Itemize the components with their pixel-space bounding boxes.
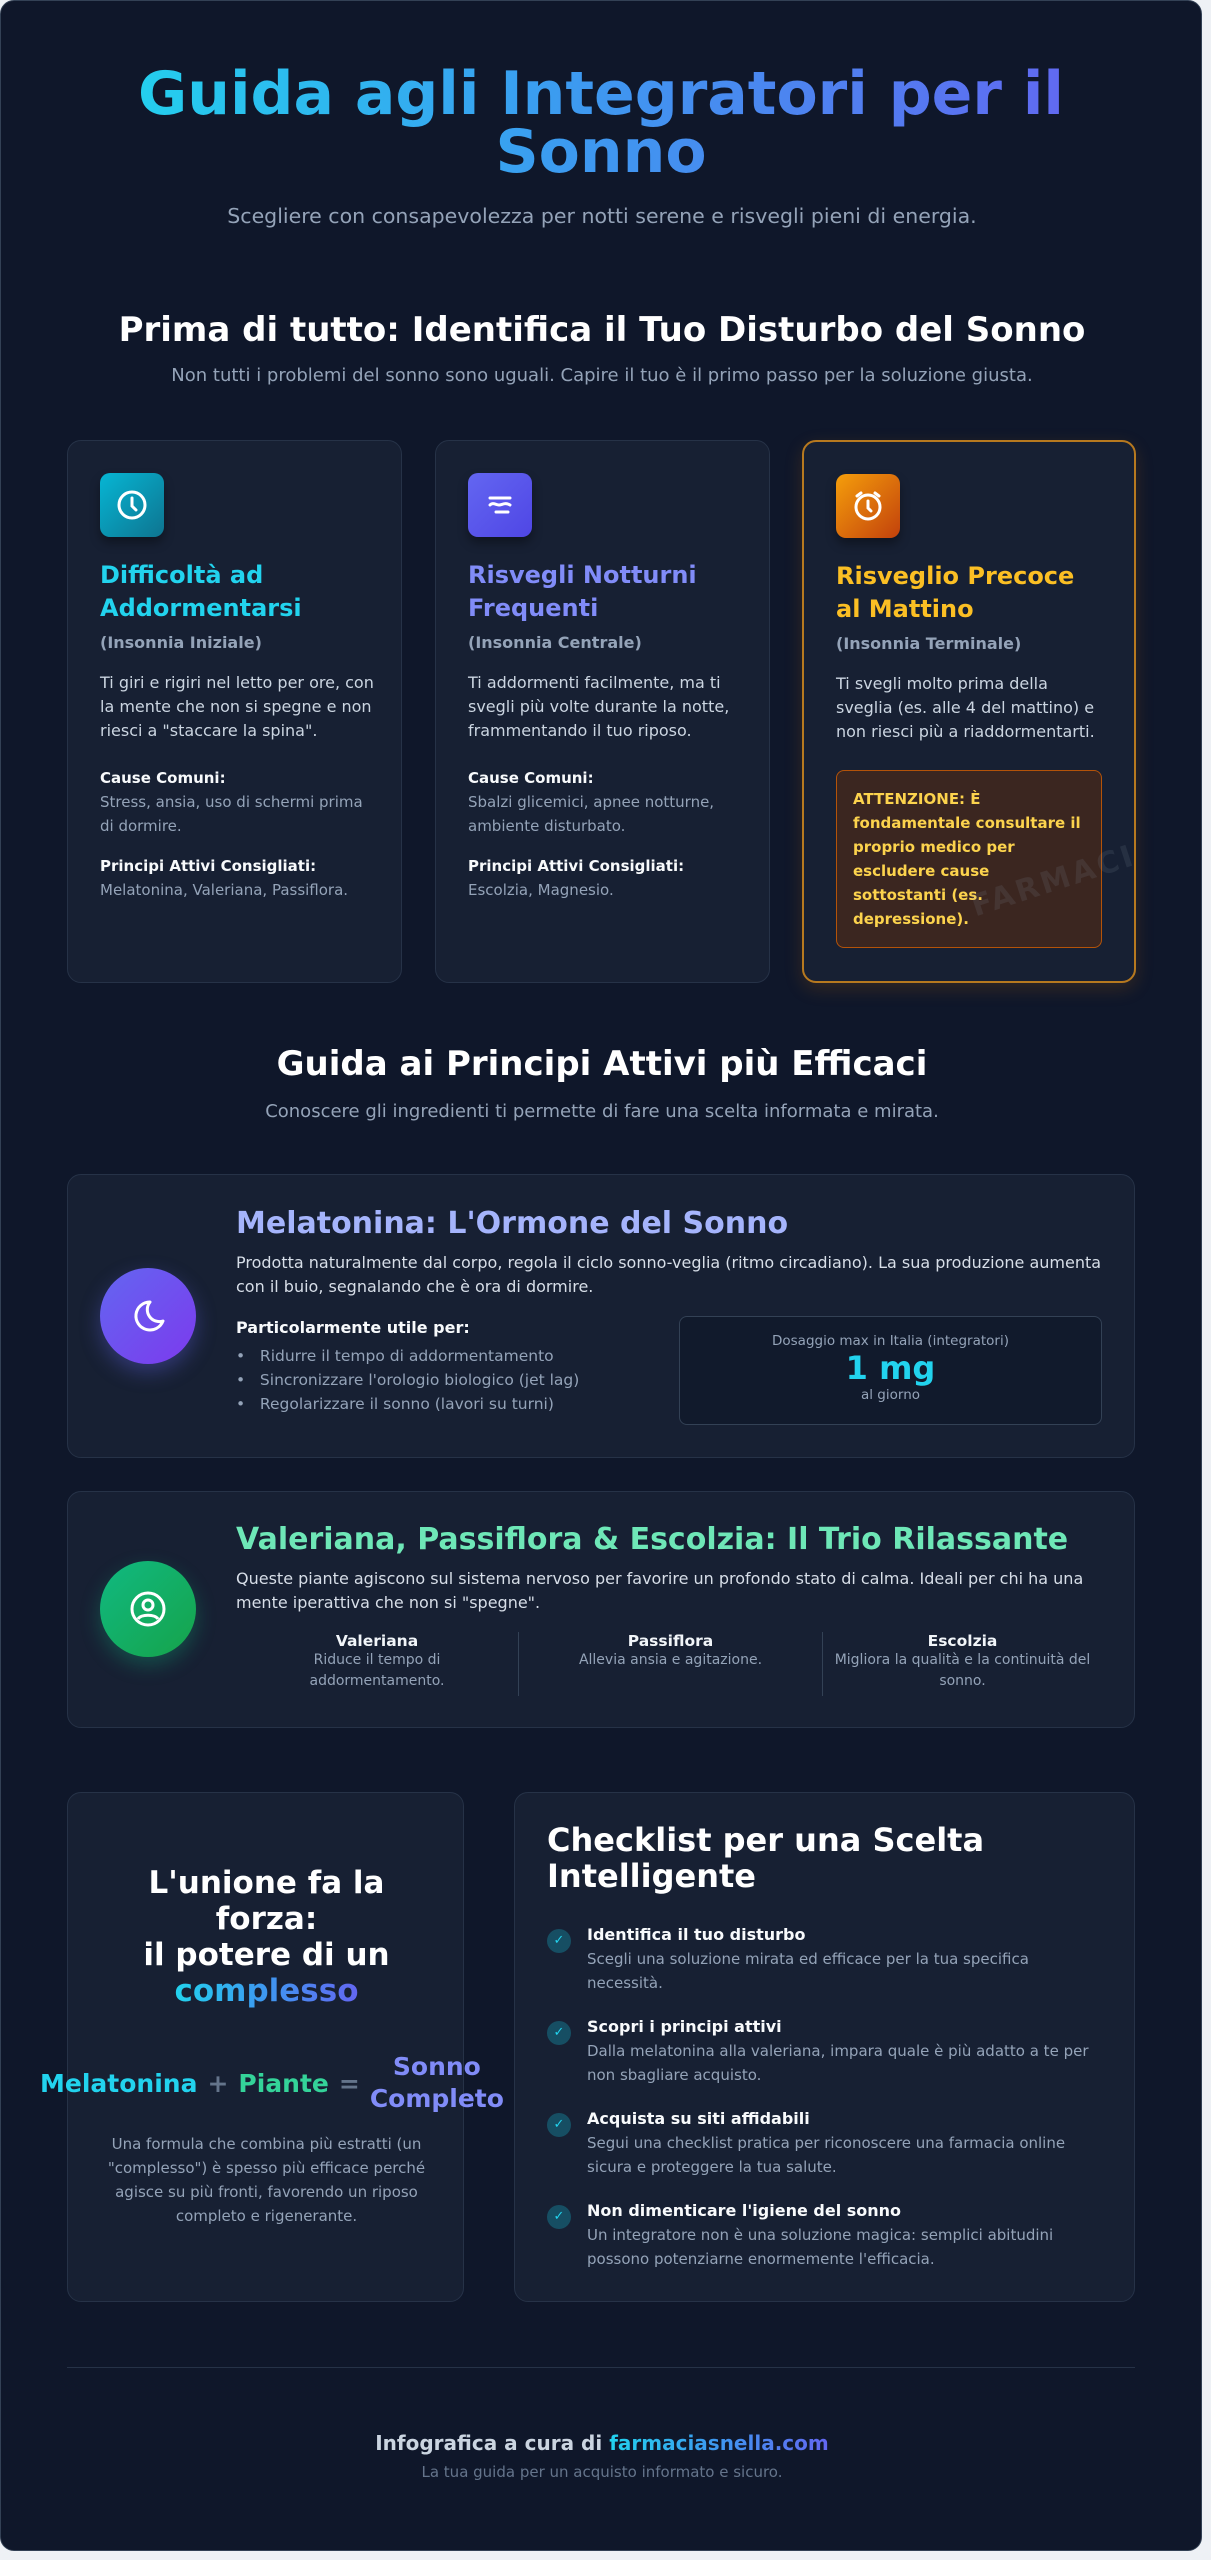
description: Prodotta naturalmente dal corpo, regola il ciclo sonno-veglia (ritmo circadiano). La sua produzione aumenta con il buio, segnalando che è ora di dormire. bbox=[236, 1253, 1101, 1296]
icon: clock bbox=[100, 473, 164, 537]
footer bbox=[375, 2431, 829, 2481]
section subtitle: Non tutti i problemi del sonno sono uguali. Capire il tuo è il primo passo per la soluzione giusta. bbox=[171, 365, 1033, 386]
card text bbox=[100, 561, 374, 899]
item 3: Acquista su siti affidabili bbox=[587, 2109, 810, 2128]
equation: = bbox=[339, 2068, 360, 2098]
callout: warning: ATTENZIONE: È fondamentale consultare il proprio medico per escludere cause sottostanti (es. depressione). bbox=[853, 790, 1081, 928]
description: Queste piante agiscono sul sistema nervoso per favorire un profondo stato di calma. Ideali per chi ha una mente iperattiva che non si "spegne". bbox=[236, 1569, 1083, 1612]
panel: insonnia centrale bbox=[435, 440, 770, 983]
card text: Risveglio Precoce bbox=[836, 562, 1074, 590]
card text: Cause Comuni: bbox=[100, 769, 226, 787]
herb: passiflora: Passiflora bbox=[628, 1632, 713, 1650]
card text: Principi Attivi Consigliati: bbox=[100, 857, 316, 875]
herb: escolzia: Migliora la qualità e la continuità del sonno. bbox=[835, 1652, 1090, 1689]
card text: Risvegli Notturni bbox=[468, 561, 697, 589]
card text: (Insonnia Iniziale) bbox=[100, 633, 262, 652]
footer: La tua guida per un acquisto informato e sicuro. bbox=[421, 2463, 782, 2481]
card text: Difficoltà ad bbox=[100, 561, 263, 589]
heading: forza: bbox=[216, 1901, 317, 1937]
title: Sonno bbox=[495, 117, 707, 187]
card text bbox=[468, 561, 729, 899]
panel: trio rilassante bbox=[67, 1491, 1135, 1728]
equation: Sonno bbox=[393, 2052, 481, 2081]
card text: Stress, ansia, uso di schermi prima di dormire. bbox=[100, 793, 363, 835]
herb: passiflora bbox=[518, 1632, 823, 1696]
list: utile per bbox=[236, 1318, 579, 1413]
card text: Frequenti bbox=[468, 594, 598, 622]
item 1 bbox=[547, 1925, 1029, 1992]
herb: valeriana: Valeriana bbox=[336, 1632, 418, 1650]
equation bbox=[40, 2052, 504, 2113]
heading: Checklist per una Scelta bbox=[547, 1821, 984, 1859]
section subtitle: Conoscere gli ingredienti ti permette di fare una scelta informata e mirata. bbox=[265, 1101, 939, 1122]
section heading: principi attivi: Guida ai Principi Attivi più Efficaci bbox=[277, 1044, 927, 1084]
equation: Completo bbox=[370, 2084, 504, 2113]
title: Guida agli Integratori per il bbox=[138, 59, 1064, 129]
heading: Melatonina: L'Ormone del Sonno bbox=[236, 1206, 788, 1241]
card text: Ti giri e rigiri nel letto per ore, con la mente che non si spegne e non riesci a "staccare la spina". bbox=[100, 673, 374, 740]
icon: alarm clock bbox=[836, 474, 900, 538]
panel: insonnia iniziale bbox=[67, 440, 402, 983]
callout: dosage: al giorno bbox=[861, 1387, 920, 1403]
card text: (Insonnia Terminale) bbox=[836, 634, 1021, 653]
card text: Addormentarsi bbox=[100, 594, 302, 622]
description: Una formula che combina più estratti (un "complesso") è spesso più efficace perché agisce su più fronti, favorendo un riposo completo e rigenerante. bbox=[108, 2135, 425, 2225]
heading bbox=[547, 1821, 984, 1895]
columns: herbs bbox=[309, 1632, 1090, 1696]
item 3: ✓ bbox=[554, 2117, 564, 2132]
card text: (Insonnia Centrale) bbox=[468, 633, 642, 652]
item 4: Non dimenticare l'igiene del sonno bbox=[587, 2201, 901, 2220]
panel: checklist bbox=[514, 1792, 1135, 2302]
card text: Cause Comuni: bbox=[468, 769, 594, 787]
herb: valeriana bbox=[309, 1632, 444, 1689]
icon: bed bbox=[468, 473, 532, 537]
list: utile per: • Regolarizzare il sonno (lavori su turni) bbox=[236, 1395, 554, 1413]
checklist items bbox=[547, 1925, 1089, 2268]
item 3: Segui una checklist pratica per riconoscere una farmacia online sicura e proteggere la tua salute. bbox=[587, 2134, 1065, 2176]
item 2 bbox=[547, 2017, 1089, 2084]
item 1: Identifica il tuo disturbo bbox=[587, 1925, 805, 1944]
panel: complesso bbox=[67, 1792, 464, 2302]
callout: dosage: 1 mg bbox=[846, 1349, 935, 1387]
heading: il potere di un bbox=[143, 1937, 390, 1973]
equation: Melatonina bbox=[40, 2068, 197, 2098]
item 2: ✓ bbox=[554, 2025, 564, 2040]
list: utile per: • Ridurre il tempo di addormentamento bbox=[236, 1347, 554, 1365]
item 2: Dalla melatonina alla valeriana, impara quale è più adatto a te per non sbagliare acquisto. bbox=[587, 2042, 1088, 2084]
heading bbox=[143, 1865, 390, 2009]
item 1: ✓ bbox=[554, 1933, 564, 1948]
item 2: Scopri i principi attivi bbox=[587, 2017, 782, 2036]
item 1: Scegli una soluzione mirata ed efficace per la tua specifica necessità. bbox=[587, 1950, 1029, 1992]
equation: Piante bbox=[238, 2068, 329, 2098]
card text: Melatonina, Valeriana, Passiflora. bbox=[100, 881, 348, 899]
callout: dosage bbox=[679, 1316, 1102, 1425]
heading: L'unione fa la bbox=[149, 1865, 384, 1901]
equation: + bbox=[207, 2068, 228, 2098]
panel: melatonina bbox=[67, 1174, 1135, 1458]
callout: dosage: Dosaggio max in Italia (integratori) bbox=[772, 1333, 1009, 1349]
item 4: ✓ bbox=[554, 2209, 564, 2224]
item 4 bbox=[547, 2201, 1053, 2268]
herb: passiflora: Allevia ansia e agitazione. bbox=[579, 1652, 762, 1668]
card text: Ti svegli molto prima della sveglia (es. alle 4 del mattino) e non riesci più a riaddormentarti. bbox=[836, 674, 1095, 741]
title bbox=[101, 65, 1101, 181]
herb: valeriana: Riduce il tempo di addormentamento. bbox=[309, 1652, 444, 1689]
heading: Intelligente bbox=[547, 1857, 756, 1895]
card text: al Mattino bbox=[836, 595, 974, 623]
footer: Infografica a cura di farmaciasnella.com bbox=[375, 2431, 829, 2455]
list: utile per: Particolarmente utile per: bbox=[236, 1318, 470, 1337]
heading: complesso bbox=[174, 1973, 359, 2009]
item 3 bbox=[547, 2109, 1065, 2176]
callout: warning bbox=[836, 770, 1102, 948]
card text: Ti addormenti facilmente, ma ti svegli più volte durante la notte, frammentando il tuo riposo. bbox=[468, 673, 729, 740]
herb: escolzia: Escolzia bbox=[928, 1632, 997, 1650]
list: utile per: • Sincronizzare l'orologio biologico (jet lag) bbox=[236, 1371, 579, 1389]
card text: Principi Attivi Consigliati: bbox=[468, 857, 684, 875]
item 4: Un integratore non è una soluzione magica: semplici abitudini possono potenziarne enormemente l'efficacia. bbox=[587, 2226, 1053, 2268]
icon: moon bbox=[100, 1268, 196, 1364]
subtitle: Scegliere con consapevolezza per notti serene e risvegli pieni di energia. bbox=[227, 204, 977, 228]
card text bbox=[836, 562, 1095, 741]
card text: Escolzia, Magnesio. bbox=[468, 881, 614, 899]
card text: Sbalzi glicemici, apnee notturne, ambiente disturbato. bbox=[468, 793, 714, 835]
panel: insonnia terminale bbox=[802, 440, 1136, 983]
heading: Valeriana, Passiflora & Escolzia: Il Trio Rilassante bbox=[236, 1522, 1068, 1557]
icon: person bbox=[100, 1561, 196, 1657]
section heading: identifica: Prima di tutto: Identifica il Tuo Disturbo del Sonno bbox=[119, 310, 1085, 350]
herb: escolzia bbox=[835, 1632, 1090, 1689]
